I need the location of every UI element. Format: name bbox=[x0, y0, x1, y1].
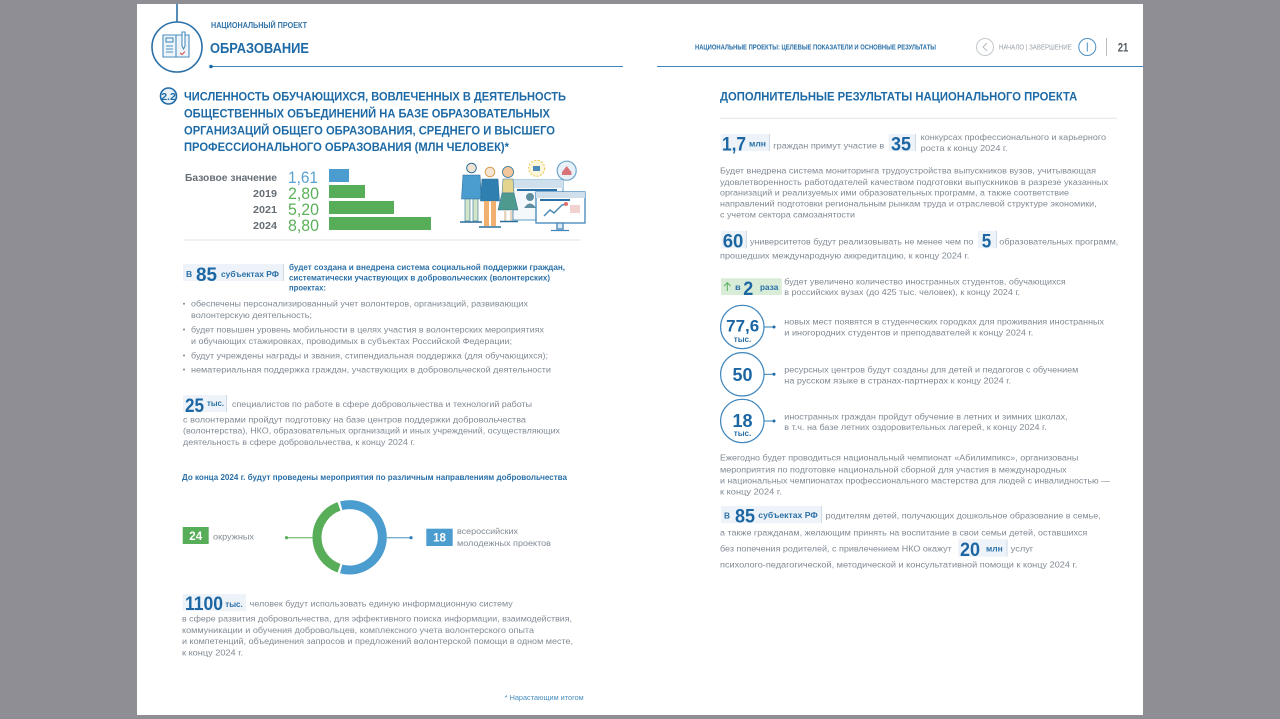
bar chart: 5,20 bbox=[288, 200, 319, 219]
stat circle: 18 thousand: в т.ч. на базе летних оздоровительных лагерей, к концу 2024 г. bbox=[784, 422, 1047, 432]
bar chart: 2,80 bbox=[288, 184, 319, 203]
left page header: ОБРАЗОВАНИЕ bbox=[210, 41, 309, 57]
text block: graduate employment monitoring: организаций и реализуемых ими образовательных программ, а также соответствие bbox=[720, 188, 1069, 198]
stat circle: 77.6 thousand bbox=[721, 305, 1105, 349]
right page header: НАЧАЛО | ЗАВЕРШЕНИЕ bbox=[999, 44, 1072, 52]
callout: 85 subjects, parents support: услуг bbox=[1011, 544, 1033, 554]
callout: 85 subjects, parents support: млн bbox=[986, 544, 1003, 554]
callout: 60 universities: прошедших международную аккредитацию, к концу 2024 г. bbox=[720, 250, 969, 260]
callout: 25 thousand specialists: тыс. bbox=[207, 398, 224, 408]
bar chart: 2019 bbox=[253, 189, 277, 200]
icon: open book with pencil bbox=[163, 32, 189, 57]
callout: 1100 thousand people: к концу 2024 г. bbox=[182, 648, 243, 658]
heading: section 2.2: ОБЩЕСТВЕННЫХ ОБЪЕДИНЕНИЙ НА БАЗЕ ОБРАЗОВАТЕЛЬНЫХ bbox=[184, 106, 550, 120]
text block: graduate employment monitoring: с учетом сектора самозанятости bbox=[720, 210, 855, 220]
stat circle: 50: на русском языке в странах-партнерах к концу 2024 г. bbox=[784, 375, 1011, 385]
callout: 60 universities: 5 bbox=[982, 231, 992, 252]
heading: section 2.2: 2.2 bbox=[161, 91, 176, 103]
bar chart: 2021 bbox=[253, 205, 277, 216]
callout: 60 universities: образовательных программ, bbox=[999, 236, 1118, 246]
callout: 85 subjects, parents support: психолого-педагогической, методической и консультативной помощи к концу 2024 г. bbox=[720, 560, 1077, 570]
text block: Abilympics bbox=[720, 453, 1110, 496]
left page header: НАЦИОНАЛЬНЫЙ ПРОЕКТ bbox=[211, 21, 307, 30]
text block: graduate employment monitoring: удовлетворенность работодателей качеством подготовки выпускников в разрезе указанных bbox=[720, 177, 1109, 187]
icon: back button bbox=[976, 38, 994, 56]
bullet list: обеспечены персонализированный учет волонтеров, организаций, развивающих bbox=[191, 299, 529, 309]
person 3 bbox=[498, 166, 518, 222]
left page header bbox=[152, 4, 623, 72]
callout: 2 times more foreign students bbox=[721, 276, 1066, 300]
text block: Abilympics: к концу 2024 г. bbox=[720, 486, 782, 496]
heading: section 2.2 bbox=[160, 88, 566, 154]
callout: 25 thousand specialists: с волонтерами пройдут подготовку на базе центров поддержки добровольчества bbox=[183, 415, 526, 425]
bar chart: 8,80 bbox=[288, 216, 319, 235]
callout: 85 subjects, parents support: родителям детей, получающих дошкольное образование в семье, bbox=[826, 510, 1101, 520]
callout: 2 times more foreign students: 2 bbox=[743, 279, 753, 300]
stat circle: 18 thousand bbox=[721, 399, 1068, 443]
callout: 1.7 million citizens bbox=[721, 132, 1106, 156]
callout: 2 times more foreign students: в российских вузах (до 425 тыс. человек), к концу 2024 г. bbox=[784, 287, 1020, 297]
callout: 85 subjects, volunteer support: 85 bbox=[196, 265, 217, 286]
callout: 60 universities: университетов будут реализовывать не менее чем по bbox=[750, 236, 974, 246]
text block: Abilympics: мероприятия по подготовке национальной сборной для участия в международных bbox=[720, 464, 1067, 474]
callout: 2 times more foreign students: в bbox=[735, 282, 741, 292]
callout: 1100 thousand people bbox=[182, 594, 573, 658]
right page header: НАЦИОНАЛЬНЫЕ ПРОЕКТЫ: ЦЕЛЕВЫЕ ПОКАЗАТЕЛИ И ОСНОВНЫЕ РЕЗУЛЬТАТЫ bbox=[695, 44, 936, 52]
bar chart: Базовое значение bbox=[185, 173, 277, 184]
donut chart bbox=[183, 505, 551, 570]
person 2 bbox=[479, 167, 501, 227]
bullet list bbox=[183, 299, 551, 374]
callout: 1100 thousand people: и компетенций, объединения запросов и предложений волонтерской помощи в одном месте, bbox=[182, 636, 573, 646]
callout: 1100 thousand people: коммуникации и обучения добровольцев, комплексного учета волонтерского опыта bbox=[182, 625, 534, 635]
callout: 1.7 million citizens: 35 bbox=[891, 135, 911, 156]
callout: 85 subjects, parents support: 20 bbox=[960, 540, 980, 561]
text block: Abilympics: Ежегодно будет проводиться национальный чемпионат «Абилимпикс», организованы bbox=[720, 453, 1078, 463]
callout: 85 subjects, volunteer support: субъектах РФ bbox=[221, 269, 280, 279]
text block: graduate employment monitoring: Будет внедрена система мониторинга трудоустройства выпускников вузов, учитывающая bbox=[720, 165, 1096, 175]
stat circle: 77.6 thousand: 77,6 bbox=[726, 317, 759, 336]
stat circle: 77.6 thousand: новых мест появятся в студенческих городках для проживания иностранных bbox=[784, 316, 1105, 326]
callout: 85 subjects, parents support: а также гражданам, желающим принять на воспитание в свои семьи детей, оставшихся bbox=[720, 528, 1088, 538]
stat circle: 77.6 thousand: тыс. bbox=[734, 335, 751, 344]
icon: up arrow bbox=[724, 283, 731, 291]
bullet list: волонтерскую деятельность; bbox=[191, 310, 312, 320]
heading: section 2.2: ЧИСЛЕННОСТЬ ОБУЧАЮЩИХСЯ, ВОВЛЕЧЕННЫХ В ДЕЯТЕЛЬНОСТЬ bbox=[184, 90, 566, 104]
legend: 24 district: окружных bbox=[213, 532, 255, 542]
icon: info button bbox=[1079, 38, 1096, 56]
callout: 85 subjects, parents support: субъектах РФ bbox=[758, 510, 818, 520]
callout: 60 universities bbox=[720, 231, 1118, 260]
callout: 25 thousand specialists: специалистов по работе в сфере добровольчества и технологий работы bbox=[232, 399, 532, 409]
stat circle: 50: 50 bbox=[732, 365, 753, 385]
callout: 1.7 million citizens: 1,7 bbox=[722, 135, 746, 156]
callout: 1.7 million citizens: роста к концу 2024 г. bbox=[921, 143, 1008, 153]
callout: 1.7 million citizens: конкурсах профессионального и карьерного bbox=[921, 132, 1106, 142]
callout: 85 subjects, volunteer support: проектах: bbox=[289, 282, 326, 292]
callout: 1.7 million citizens: граждан примут участие в bbox=[773, 140, 885, 150]
text block: graduate employment monitoring: направлений подготовки региональным рынкам труда и отраслевой структуре экономики, bbox=[720, 198, 1097, 208]
callout: 85 subjects, parents support: без попечения родителей, с привлечением НКО окажут bbox=[720, 544, 952, 554]
stat circle: 50: ресурсных центров будут созданы для детей и педагогов с обучением bbox=[784, 365, 1078, 375]
bullet list: и обучающих стажировках, проводимых в субъектах Российской Федерации; bbox=[191, 336, 512, 346]
text block: graduate employment monitoring bbox=[720, 165, 1109, 220]
bar chart: 2024 bbox=[253, 221, 277, 232]
callout: 1100 thousand people: тыс. bbox=[225, 599, 243, 609]
right page header: 21 bbox=[1118, 40, 1129, 54]
bar chart: 1,61 bbox=[288, 168, 318, 187]
callout: 25 thousand specialists bbox=[183, 395, 561, 447]
callout: 25 thousand specialists: 25 bbox=[185, 396, 204, 417]
heading: events by 2024: До конца 2024 г. будут проведены мероприятия по различным направлениям добровольчества bbox=[182, 472, 567, 482]
callout: 1100 thousand people: 1100 bbox=[185, 594, 223, 615]
callout: 1100 thousand people: в сфере развития добровольчества, для эффективного поиска информации, взаимодействия, bbox=[182, 614, 572, 624]
right page header bbox=[657, 38, 1143, 66]
stat circle: 18 thousand: иностранных граждан пройдут обучение в летних и зимних школах, bbox=[784, 411, 1068, 421]
callout: 1.7 million citizens: млн bbox=[749, 139, 766, 149]
heading: additional results: ДОПОЛНИТЕЛЬНЫЕ РЕЗУЛЬТАТЫ НАЦИОНАЛЬНОГО ПРОЕКТА bbox=[720, 90, 1078, 104]
person 1 bbox=[460, 163, 482, 222]
callout: 1100 thousand people: человек будут использовать единую информационную систему bbox=[250, 599, 513, 609]
illustration: people and monitors bbox=[460, 160, 585, 230]
callout: 25 thousand specialists: деятельность в сфере добровольчества, к концу 2024 г. bbox=[183, 437, 415, 447]
legend: 18 all-Russian: всероссийских bbox=[457, 526, 519, 536]
bar chart bbox=[185, 168, 431, 235]
text block: Abilympics: и национальных чемпионатах профессионального мастерства для людей с инвалидностью — bbox=[720, 475, 1110, 485]
legend: 18 all-Russian bbox=[426, 526, 551, 548]
callout: 85 subjects, volunteer support: будет создана и внедрена система социальной поддержки граждан, bbox=[289, 262, 565, 272]
stat circle: 18 thousand: тыс. bbox=[734, 429, 751, 438]
legend: 24 district bbox=[183, 527, 255, 544]
page sheet bbox=[137, 4, 1143, 715]
bullet list: будут учреждены награды и звания, стипендиальная поддержка (для обучающихся); bbox=[191, 350, 548, 360]
stat circle: 77.6 thousand: и иногородних студентов и преподавателей к концу 2024 г. bbox=[784, 328, 1033, 338]
legend: 24 district: 24 bbox=[189, 531, 203, 543]
callout: 2 times more foreign students: раза bbox=[760, 282, 779, 292]
heading: section 2.2: ПРОФЕССИОНАЛЬНОГО ОБРАЗОВАНИЯ (МЛН ЧЕЛОВЕК)* bbox=[184, 140, 509, 154]
callout: 85 subjects, parents support bbox=[720, 506, 1101, 570]
legend: 18 all-Russian: 18 bbox=[433, 533, 446, 545]
stat circle: 50 bbox=[721, 353, 1078, 396]
callout: 2 times more foreign students: будет увеличено количество иностранных студентов, обучающихся bbox=[784, 276, 1066, 286]
callout: 85 subjects, parents support: В bbox=[724, 510, 730, 520]
legend: 18 all-Russian: молодежных проектов bbox=[457, 538, 551, 548]
bullet list: будет повышен уровень мобильности в целях участия в волонтерских мероприятиях bbox=[191, 324, 545, 334]
footnote: * Нарастающим итогом bbox=[505, 693, 584, 702]
heading: section 2.2: ОРГАНИЗАЦИЙ ОБЩЕГО ОБРАЗОВАНИЯ, СРЕДНЕГО И ВЫСШЕГО bbox=[184, 122, 555, 138]
callout: 60 universities: 60 bbox=[723, 231, 743, 252]
callout: 85 subjects, parents support: 85 bbox=[735, 506, 755, 527]
callout: 25 thousand specialists: (волонтерства), НКО, образовательных организаций и иных учреждений, осуществляющих bbox=[183, 426, 561, 436]
callout: 85 subjects, volunteer support: систематически участвующих в добровольческих (волонтерских) bbox=[289, 272, 550, 282]
bullet list: нематериальная поддержка граждан, участвующих в добровольческой деятельности bbox=[191, 364, 551, 374]
stat circle: 18 thousand: 18 bbox=[732, 411, 753, 431]
callout: 85 subjects, volunteer support: В bbox=[186, 269, 192, 279]
callout: 85 subjects, volunteer support bbox=[183, 262, 565, 292]
